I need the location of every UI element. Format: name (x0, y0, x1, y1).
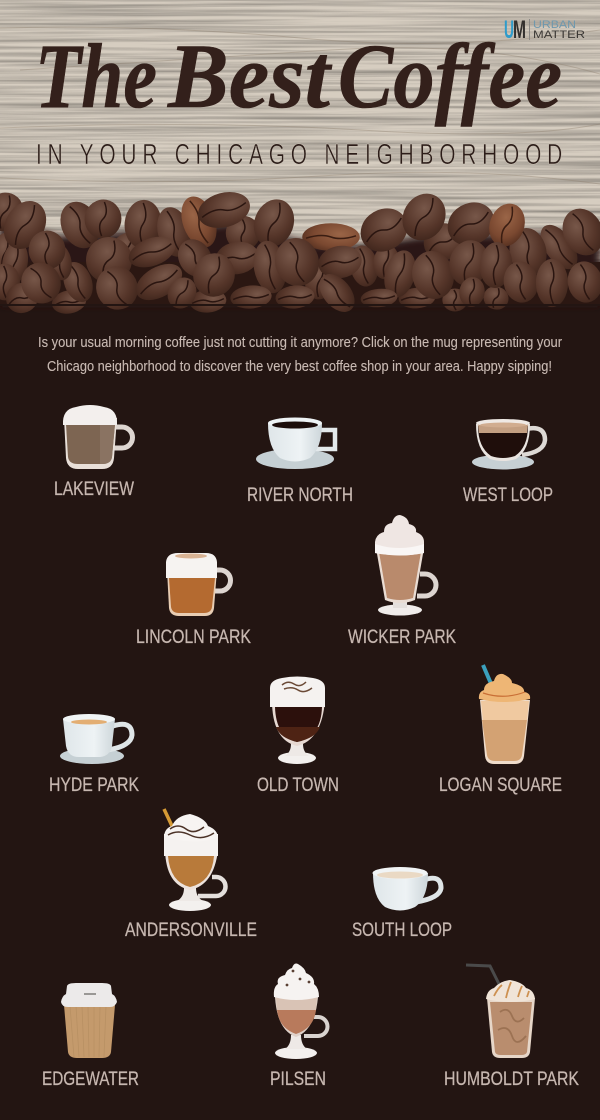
item: River North (247, 418, 353, 506)
label: SOUTH LOOP (352, 920, 452, 941)
label: RIVER NORTH (247, 485, 353, 506)
item: Wicker Park (348, 515, 456, 648)
item: Andersonville (125, 809, 257, 941)
icon: stemmed glass with whipped cream (274, 964, 328, 1059)
icon: espresso glass on saucer (472, 419, 545, 470)
label: ANDERSONVILLE (125, 920, 257, 941)
coffee beans (0, 186, 600, 319)
icon: cup and saucer (60, 714, 132, 764)
logo: Urban Matter: MATTER (533, 29, 585, 41)
label: WEST LOOP (463, 485, 553, 506)
label: LINCOLN PARK (136, 627, 251, 648)
icon: takeaway cup (61, 983, 117, 1058)
label: EDGEWATER (42, 1069, 139, 1090)
icon: tall glass with whipped cream (375, 515, 436, 616)
item: Lakeview (54, 405, 134, 500)
title: Best (167, 25, 332, 127)
label: OLD TOWN (257, 775, 339, 796)
icon: white cup on saucer (256, 418, 335, 469)
icon: latte glass mug (166, 553, 230, 616)
icon: glass mug with foam (63, 405, 132, 469)
intro text (38, 334, 562, 375)
label: LOGAN SQUARE (439, 775, 562, 796)
item: Hyde Park (49, 714, 139, 796)
logo: Urban Matter: M (513, 16, 526, 44)
item: Old Town (257, 676, 339, 796)
title (35, 25, 562, 127)
label: PILSEN (270, 1069, 326, 1090)
item: Edgewater (42, 983, 139, 1090)
icon: white cup (372, 867, 441, 910)
icon: iced coffee with dark straw (466, 965, 535, 1058)
icon: iced drink with blue straw (479, 665, 530, 764)
label: WICKER PARK (348, 627, 456, 648)
logo: Urban Matter: URBAN (533, 19, 576, 31)
label: HYDE PARK (49, 775, 139, 796)
item: Lincoln Park (136, 553, 251, 648)
item: Humboldt Park (444, 965, 579, 1090)
item: Pilsen (270, 964, 328, 1090)
label: LAKEVIEW (54, 479, 134, 500)
item: Logan Square (439, 665, 562, 796)
logo: Urban Matter (504, 16, 585, 44)
logo: Urban Matter: U (504, 16, 514, 44)
header: wood plank with coffee beans (0, 0, 600, 319)
icon: Irish coffee glass with gold straw (164, 809, 226, 911)
icon: stemmed glass with dark coffee (270, 676, 325, 764)
item: West Loop (463, 419, 553, 506)
title: Coffee (338, 25, 562, 127)
item: South Loop (352, 867, 452, 941)
title: The (35, 25, 157, 127)
